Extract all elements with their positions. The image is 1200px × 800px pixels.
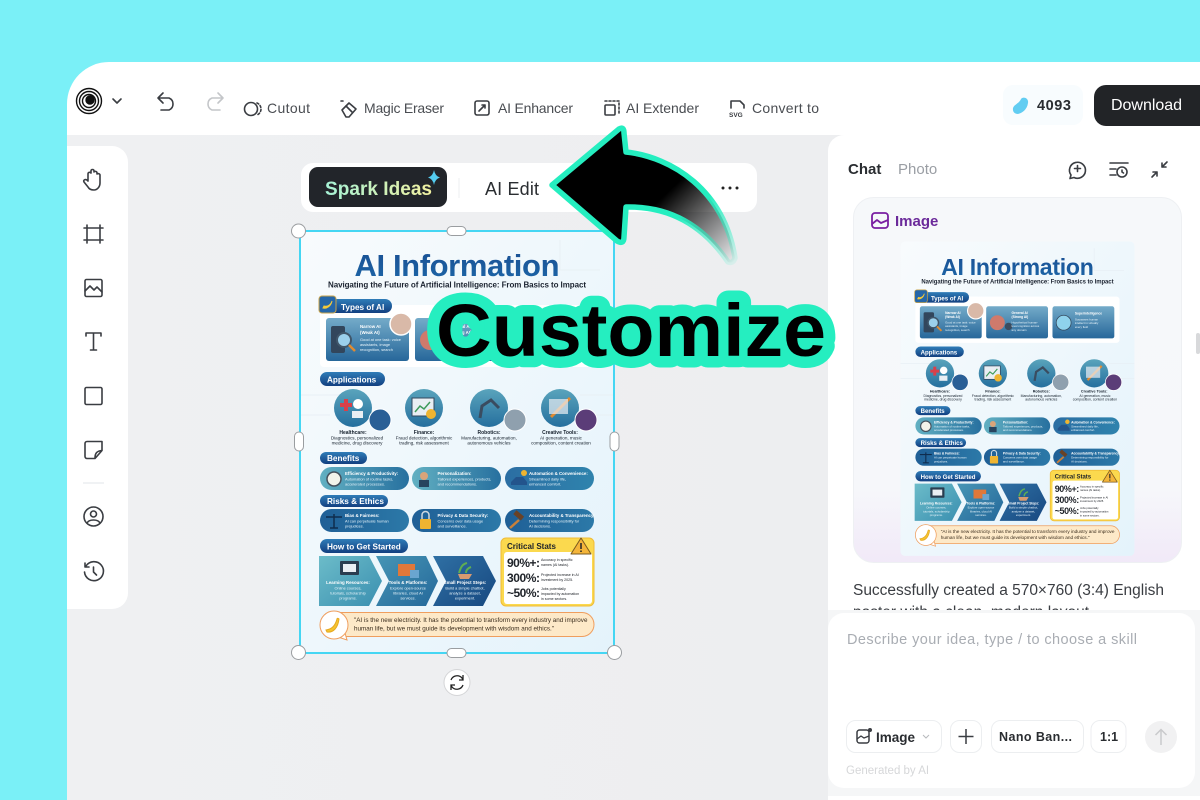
poster preview: human life, but we must guide its development with wisdom and ethics." [941,535,1090,540]
icon: logo [76,88,102,114]
section: how to get started: experiment. [455,596,475,600]
model button [992,720,1084,752]
section: risks and ethics: Risks & Ethics [327,497,384,506]
critical stats panel: Accuracy in specific [541,558,573,562]
spark ideas button: Spark Ideas [325,179,432,200]
section: applications: composition, content creation [531,440,591,446]
section: types of AI: intellect in virtually [534,338,566,343]
poster preview: Types of AI [931,295,964,302]
poster preview: services. [975,513,987,517]
ratio button: 1:1 [1100,730,1118,744]
poster preview: Good at one task: voice [945,320,976,324]
icon: sticky note [85,442,102,458]
poster preview: experiment. [1016,513,1031,517]
section: types of AI: assistants, image [360,342,390,347]
poster preview: Learning Resources: [920,501,953,505]
selection frame and handles [292,224,622,696]
add button [950,720,982,752]
poster preview: recognition, search [945,328,970,332]
section: benefits: Automation & Convenience: [529,471,588,476]
right chat panel [828,135,1200,800]
section: applications: autonomous vehicles [467,440,511,446]
poster preview: Determining responsibility for [1071,456,1108,460]
poster preview: Streamlined daily life, [1071,424,1099,428]
section: how to get started: libraries, cloud AI [393,590,423,596]
section: benefits: Automation of routine tasks, [345,476,393,482]
section: types of AI: Surpasses human [534,333,565,338]
poster preview: Build a simple chatbot, [1009,506,1038,510]
poster preview: any domain [1012,328,1027,332]
poster preview: Bias & Fairness: [934,452,960,456]
poster preview: Superintelligence [1075,312,1102,316]
poster preview: composition, content creation [1073,398,1117,402]
chat message, clipped line: poster with a clean, modern layout. [853,604,1093,621]
icon: history list [1110,163,1128,177]
section: applications: Manufacturing, automation, [461,436,517,440]
section: how to get started: analyze a dataset, [449,590,481,596]
section: how to get started: services. [400,596,416,600]
critical stats panel: Critical Stats [507,542,556,551]
quote callout [320,611,594,640]
section: types of AI: Superintelligence [534,325,571,330]
floating action bar [301,163,757,212]
poster preview: AI decisions. [1071,459,1088,463]
section: types of AI: any domain [449,347,469,352]
poster preview: Tools & Platforms: [967,501,995,505]
left tool rail [67,146,128,609]
section: applications: trading, risk assessment [399,440,449,446]
critical stats panel: Jobs potentially [541,587,566,591]
poster preview: prejudices. [934,459,948,463]
poster preview [900,241,1134,556]
critical stats panel: 90%+: [507,556,540,570]
icon: AI enhancer [475,101,489,115]
critical stats panel: names (AI tasks). [541,563,569,567]
quote callout: human life, but we must guide its development with wisdom and ethics." [354,626,554,632]
section: applications [320,372,597,446]
poster preview: intellect in virtually [1075,321,1099,325]
poster preview: level cognition across [1012,324,1040,328]
placeholder text: Describe your idea, type / to choose a skill [847,632,1137,648]
poster preview: AI can perpetuate human [934,456,967,460]
poster preview: Navigating the Future of Artificial Intelligence: From Basics to Impact [921,280,1114,286]
photo tab: Photo [898,161,937,178]
poster preview: Benefits [921,408,945,415]
poster preview: Online courses, [926,506,946,510]
icon: redo [208,93,223,110]
icon: AI extender [605,101,619,115]
section: benefits: Efficiency & Productivity: [345,471,399,476]
poster on canvas [300,231,614,653]
section: applications: Applications [327,376,377,384]
footnote: Generated by AI [846,765,929,777]
poster preview: 300%: [1055,495,1079,505]
section: risks and ethics: Bias & Fairness: [345,513,380,518]
section: types of AI: (Weak AI) [360,330,380,335]
section: applications: Diagnostics, personalized [331,436,384,440]
image mode button: Image [876,730,916,745]
poster preview: assistants, image [945,324,968,328]
section: risks and ethics: Accountability & Transparency: [529,513,595,518]
section: benefits [320,452,594,490]
label: image: Image [895,213,938,230]
section: benefits: Benefits [327,454,360,463]
poster preview: AI generation, music [1079,394,1111,398]
image mode button [846,720,942,752]
section: risks and ethics: AI can perpetuate human [345,518,389,524]
icon: crop frame [84,225,103,243]
scrollbar [1196,333,1200,354]
poster preview: Accountability & Transparency: [1071,452,1120,456]
critical stats panel: Projected increase in AI [541,573,579,577]
section: applications: Healthcare: [339,430,367,436]
image result card [854,198,1182,562]
poster preview: Manufacturing, automation, [1021,394,1062,398]
section: risks and ethics: AI decisions. [529,524,551,528]
icon: history [84,562,103,581]
section: risks and ethics: Privacy & Data Security: [438,513,489,518]
poster preview: impacted by automation [1080,510,1109,514]
section: how to get started: programs. [339,596,357,600]
poster preview: Narrow AI [945,311,961,315]
section: types of AI: (Strong AI) [449,330,472,335]
icon: magic eraser [341,101,356,117]
icon: new chat [1069,162,1085,178]
poster preview: libraries, cloud AI [970,509,992,513]
credits pill: 4093 [1037,98,1071,114]
section: types of AI: recognition, search [360,347,393,352]
section: how to get started: Build a simple chatbot, [445,586,485,590]
critical stats panel: in some sectors. [541,597,567,601]
poster preview: and recommendations. [1003,428,1033,432]
canvas area [67,135,1200,800]
poster preview: Tailored experiences, products, [1003,424,1043,428]
section: risks and ethics: and surveillance. [438,524,467,528]
label: AI enhancer: AI Enhancer [498,100,573,116]
icon: cutout [244,102,261,116]
section: risks and ethics: Determining responsibility for [529,518,580,524]
poster preview: trading, risk assessment [975,398,1011,402]
icon: rectangle [85,388,102,404]
poster preview: General AI [1012,311,1028,315]
poster preview: Personalization: [1003,420,1028,424]
poster preview: Automation of routine tasks, [934,424,970,428]
poster preview: analyze a dataset, [1012,509,1035,513]
chat tab: Chat [848,161,881,178]
section: applications: Robotics: [477,430,501,436]
section: types of AI: level cognition across [449,342,486,347]
more menu [722,186,738,190]
top toolbar [76,85,1200,126]
section: benefits: and recommendations. [438,482,477,486]
section: risks and ethics [320,495,595,532]
critical stats panel: 300%: [507,571,540,585]
section: how to get started: How to Get Started [327,542,401,552]
section: how to get started: Small Project Steps: [444,580,487,585]
label: magic eraser: Magic Eraser [364,100,444,116]
credits pill [1003,85,1083,125]
poster preview: enhanced comfort. [1071,428,1095,432]
model button: Nano Ban... [999,730,1072,744]
poster preview: (Weak AI) [945,315,960,319]
quote callout: "AI is the new electricity. It has the potential to transform every industry and improve [354,617,588,624]
critical stats panel: ~50%: [507,586,540,600]
icon: image [85,280,102,296]
download button [1094,85,1200,126]
poster preview: tutorials, scholarship [923,509,950,513]
poster preview: Surpasses human [1075,317,1099,321]
section: how to get started: tutorials, scholarship [330,590,366,596]
customize headline: Customize [436,289,826,372]
poster preview: Diagnostics, personalized [924,394,962,398]
download button: Download [1111,97,1182,114]
section: applications: Finance: [414,430,435,436]
section: how to get started: Tools & Platforms: [389,580,428,585]
poster title: AI Information [354,248,560,283]
section: benefits: enhanced comfort. [529,482,561,486]
poster preview: Jobs potentially [1080,506,1099,510]
icon: convert to svg [729,101,744,119]
poster preview: Hypothetical human- [1012,320,1038,324]
AI edit: AI Edit [485,179,539,199]
arrow pointing to AI Edit [552,128,735,262]
poster preview: 90%+: [1055,484,1079,494]
poster preview: names (AI tasks). [1080,488,1101,492]
poster preview: Fraud detection, algorithmic [972,394,1014,398]
icon: chevron [113,99,121,103]
poster preview: Finance: [985,390,1001,394]
ratio button [1091,720,1126,752]
section: types of AI [319,296,594,367]
poster preview: investment by 2025. [1080,499,1104,503]
poster preview: accelerated processes. [934,428,964,432]
poster preview: Efficiency & Productivity: [934,420,974,424]
icon: undo [158,93,173,110]
section: types of AI: Good at one task: voice [360,337,401,342]
label: convert to: Convert to [752,100,819,116]
poster preview: medicine, drug discovery [924,398,962,402]
critical stats panel: investment by 2025. [541,578,573,582]
section: applications: medicine, drug discovery [332,440,383,446]
section: types of AI: every field [534,343,552,348]
section: benefits: Tailored experiences, products, [438,476,491,482]
chat message: Successfully created a 570×760 (3:4) English [853,582,1164,599]
poster preview: autonomous vehicles [1025,398,1058,402]
poster preview: Robotics: [1033,390,1050,394]
critical stats panel [501,538,594,606]
icon: collapse [1152,162,1167,177]
poster preview: programs. [930,513,943,517]
section: types of AI: Types of AI [341,303,384,312]
section: applications: Fraud detection, algorithmic [396,436,453,440]
poster preview: Concerns over data usage [1003,456,1037,460]
poster preview: Small Project Steps: [1008,501,1039,505]
poster preview: ~50%: [1055,506,1079,516]
poster subtitle: Navigating the Future of Artificial Intelligence: From Basics to Impact [328,280,586,290]
poster preview: Automation & Convenience: [1071,420,1115,424]
section: types of AI: Hypothetical human- [449,337,485,342]
critical stats panel: impacted by automation [541,592,579,596]
section: how to get started: Learning Resources: [326,580,370,585]
icon: hand [84,170,100,190]
section: how to get started: Online courses, [334,586,362,590]
section: risks and ethics: prejudices. [345,524,364,528]
poster preview: in some sectors. [1080,513,1100,517]
label: cutout: Cutout [267,100,310,116]
poster preview: Accuracy in specific [1080,484,1104,488]
poster preview: Healthcare: [930,390,950,394]
poster preview: Projected increase in AI [1080,496,1108,500]
send button [1145,721,1177,753]
icon: user [84,507,103,526]
section: types of AI: General AI [449,324,471,329]
poster preview: How to Get Started [921,474,976,481]
icon: convert to svg: SVG [729,112,743,119]
poster preview: AI Information [941,254,1094,280]
section: benefits: Streamlined daily life, [529,476,566,482]
section: risks and ethics: Concerns over data usage [438,518,483,524]
icon: image purple [872,213,888,228]
poster preview: Applications [921,349,958,356]
poster preview: "AI is the new electricity. It has the potential to transform every industry and improve [941,529,1115,534]
section: benefits: Personalization: [438,471,472,476]
section: applications: AI generation, music [540,436,583,440]
label: AI extender: AI Extender [626,100,699,116]
poster preview: (Strong AI) [1012,315,1028,319]
poster preview: Privacy & Data Security: [1003,452,1041,456]
poster preview: Critical Stats [1055,474,1092,480]
icon: text [86,333,101,350]
section: how to get started: Explore open-source [390,586,426,590]
poster preview: every field [1075,325,1088,329]
poster preview: Explore open-source [968,506,995,510]
poster preview: Creative Tools: [1081,390,1107,394]
section: applications: Creative Tools: [542,430,578,436]
prompt input card [828,610,1200,800]
section: benefits: accelerated processes. [345,482,385,486]
poster preview: Risks & Ethics [921,440,964,447]
spark ideas button [309,167,447,207]
rotate handle [444,670,470,696]
section: types of AI: Narrow AI [360,324,381,329]
poster preview: and surveillance. [1003,459,1025,463]
section: how to get started [319,539,496,606]
